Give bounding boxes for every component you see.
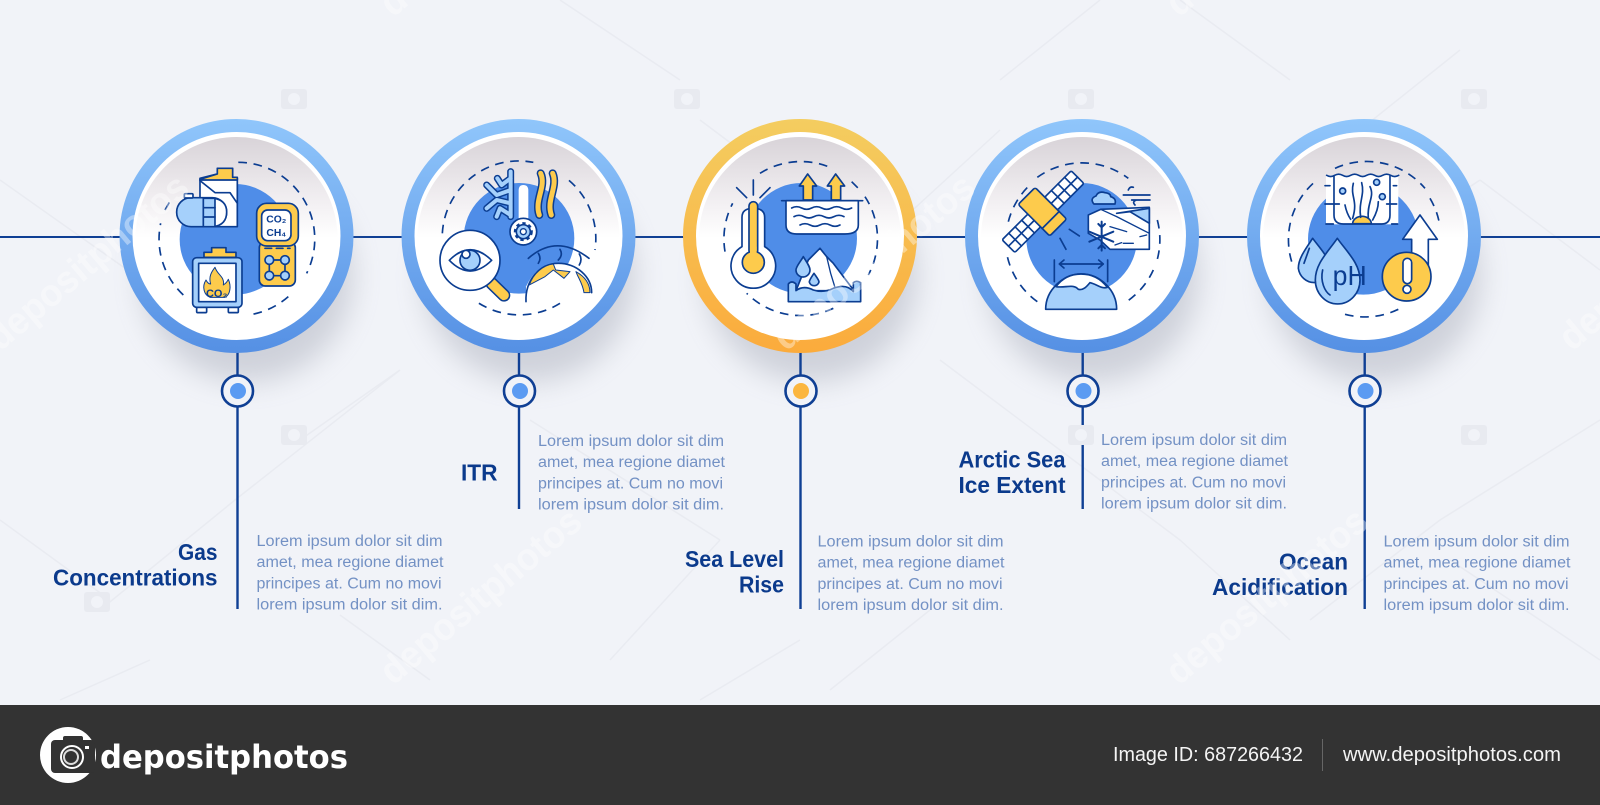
icon label: CO2 CH4 <box>266 215 287 239</box>
text block: principes at. Cum no movi <box>818 576 1002 593</box>
text block: Lorem ipsum dolor sit dim <box>1101 432 1287 449</box>
text block: principes at. Cum no movi <box>538 476 723 492</box>
text block: Lorem ipsum dolor sit dim <box>818 534 1004 550</box>
text block: Lorem ipsum dolor sit dim <box>1384 534 1570 550</box>
text block: Lorem ipsum dolor sit dim <box>256 533 442 550</box>
panel: Gas Concentrations <box>53 119 444 614</box>
heading: Rise <box>739 572 784 598</box>
heading: Arctic Sea <box>958 446 1066 472</box>
node marker <box>504 376 535 406</box>
icon label: CO2 CH4: CO₂ <box>266 215 287 226</box>
website: www.depositphotos.com <box>1342 744 1561 766</box>
heading: Gas <box>178 539 218 565</box>
text block: lorem ipsum dolor sit dim. <box>1384 597 1570 614</box>
icon: thermometer, eye and warming globe <box>440 161 596 315</box>
node marker <box>1068 376 1098 406</box>
panel: Sea Level Rise <box>683 119 1005 614</box>
icon: gas tanks, detector and furnace <box>159 162 315 315</box>
heading: Acidification <box>1212 574 1348 600</box>
text block: amet, mea regione diamet <box>256 554 444 571</box>
watermark text: depositphotos <box>1158 500 1376 693</box>
text block: lorem ipsum dolor sit dim. <box>1101 496 1287 512</box>
heading: Ocean <box>1279 548 1348 574</box>
image id: Image ID: 687266432 <box>1113 744 1303 766</box>
text block: lorem ipsum dolor sit dim. <box>256 596 442 614</box>
watermark text: depositphotos <box>765 166 983 359</box>
icon label: CO2 CH4: CH₄ <box>266 228 286 239</box>
icon label: pH: pH <box>1333 260 1367 291</box>
node marker <box>786 376 816 406</box>
panel: ITR <box>402 119 726 514</box>
text block: principes at. Cum no movi <box>1101 474 1286 492</box>
footer bar <box>0 705 1600 805</box>
text block: lorem ipsum dolor sit dim. <box>538 496 724 514</box>
text block: principes at. Cum no movi <box>256 576 442 592</box>
connecting timeline <box>0 236 1600 238</box>
logo wordmark: depositphotos <box>100 738 348 776</box>
heading: Sea Level <box>685 546 784 572</box>
icon label: CO2: CO₂ <box>206 288 227 300</box>
node marker <box>1350 376 1380 406</box>
heading: Concentrations <box>53 564 218 590</box>
heading: Ice Extent <box>958 472 1066 498</box>
icon: ocean vents, pH drops and warning <box>1288 161 1440 317</box>
text block: Lorem ipsum dolor sit dim <box>538 433 724 450</box>
text block: amet, mea regione diamet <box>1101 453 1289 470</box>
watermark cameras <box>84 89 1487 612</box>
node marker <box>222 376 253 406</box>
panel: Ocean Acidification <box>1212 119 1571 614</box>
icon: thermometer, rising water and melting iceberg <box>724 162 877 316</box>
icon: satellite measuring arctic ice <box>992 161 1160 309</box>
text block: amet, mea regione diamet <box>818 554 1005 572</box>
logo: camera badge <box>40 727 96 783</box>
text block: principes at. Cum no movi <box>1384 576 1568 593</box>
text block: amet, mea regione diamet <box>538 454 726 471</box>
text block: amet, mea regione diamet <box>1384 554 1571 572</box>
panel: Arctic Sea Ice Extent <box>958 119 1289 512</box>
watermark text: depositphotos <box>372 500 590 693</box>
text block: lorem ipsum dolor sit dim. <box>818 597 1004 614</box>
heading: ITR <box>461 460 498 486</box>
